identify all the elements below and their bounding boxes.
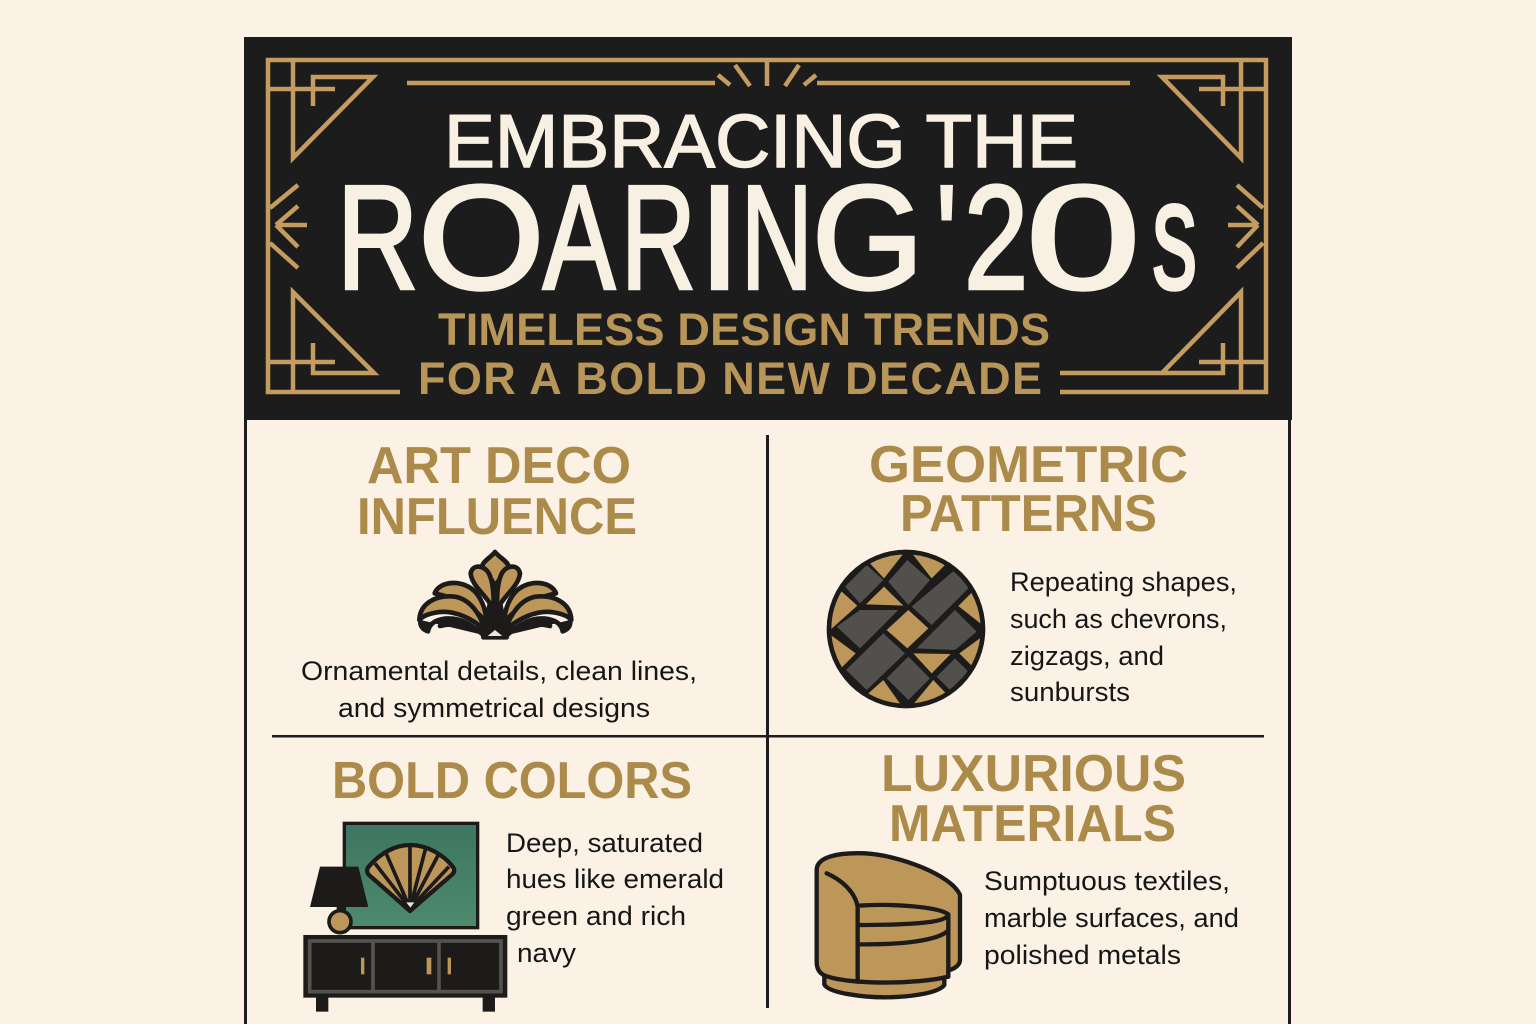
text: art deco description: Ornamental details, clean lines, <box>301 656 697 686</box>
lamp <box>310 867 368 933</box>
text: bold colors description: green and rich <box>506 901 686 931</box>
title: roaring '20s: N <box>741 155 813 320</box>
heading: art deco influence <box>357 437 637 546</box>
heading: luxurious materials: LUXURIOUS <box>881 745 1186 803</box>
text: geometric description: such as chevrons, <box>1010 604 1227 634</box>
heading: luxurious materials: MATERIALS <box>889 795 1176 853</box>
painting with shell <box>344 823 478 928</box>
title: roaring '20s: G <box>812 155 924 320</box>
text: luxurious description: Sumptuous textiles, <box>984 866 1230 896</box>
subtitle: FOR A BOLD NEW DECADE <box>418 353 1042 404</box>
text: bold colors description <box>506 828 724 968</box>
panel: geometric patterns <box>827 436 1237 708</box>
title: roaring '20s: ' <box>936 155 957 320</box>
title: roaring '20s: O <box>418 154 545 320</box>
panel: art deco influence <box>301 437 697 723</box>
text: bold colors description: navy <box>517 938 577 968</box>
heading: geometric patterns <box>869 436 1188 543</box>
title: roaring '20s: A <box>543 156 616 320</box>
icon: room with painting, lamp and sideboard <box>303 823 507 1012</box>
text: art deco description <box>301 656 697 723</box>
text: geometric description: Repeating shapes, <box>1010 567 1237 597</box>
text: luxurious description <box>984 866 1239 970</box>
icon: geometric tile circle <box>827 550 987 708</box>
text: geometric description: sunbursts <box>1010 677 1130 707</box>
title: roaring '20s <box>337 149 1197 323</box>
title: roaring '20s: 0 <box>1026 155 1140 320</box>
heading: bold colors: BOLD COLORS <box>332 752 692 810</box>
icon: deco fan ornament <box>419 552 571 637</box>
panel borders and dividers <box>244 420 1291 1024</box>
title: roaring '20s: R <box>621 155 696 321</box>
title: roaring '20s: I <box>699 156 740 320</box>
text: geometric description <box>1010 567 1237 707</box>
heading: art deco influence: INFLUENCE <box>357 488 637 546</box>
text: bold colors description: Deep, saturated <box>506 828 703 858</box>
title: roaring '20s: 2 <box>964 156 1028 321</box>
text: geometric description: zigzags, and <box>1010 641 1164 671</box>
heading: luxurious materials <box>881 745 1186 853</box>
text: luxurious description: marble surfaces, and <box>984 903 1239 933</box>
heading: geometric patterns: PATTERNS <box>900 485 1157 543</box>
text: luxurious description: polished metals <box>984 940 1181 970</box>
heading: geometric patterns: GEOMETRIC <box>869 436 1188 494</box>
text: art deco description: and symmetrical designs <box>338 693 650 723</box>
subtitle <box>418 304 1050 404</box>
panel: bold colors <box>303 752 724 1012</box>
subtitle: TIMELESS DESIGN TRENDS <box>438 304 1050 355</box>
title: embracing the: EMBRACING THE <box>444 99 1078 183</box>
header banner <box>244 37 1292 420</box>
sideboard <box>303 935 507 1012</box>
title: roaring '20s: s <box>1152 149 1197 323</box>
title: roaring '20s: R <box>337 155 418 320</box>
icon: gold armchair <box>817 853 960 997</box>
art deco gold frame <box>268 60 1266 392</box>
panel: luxurious materials <box>817 745 1239 997</box>
text: bold colors description: hues like emerald <box>506 864 724 894</box>
heading: art deco influence: ART DECO <box>367 437 631 495</box>
